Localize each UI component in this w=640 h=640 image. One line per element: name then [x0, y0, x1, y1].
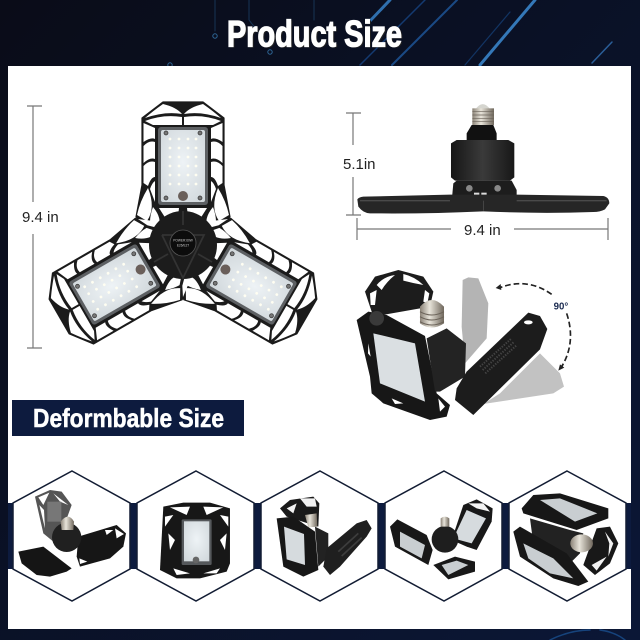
dimension: top view height: 9.4 in [22, 209, 59, 226]
hexagon 5: closed lamp with bulb [513, 493, 618, 586]
hexagon 1: lamp with open arms [18, 490, 126, 577]
title: Product Size [228, 14, 404, 56]
lamp: side view [357, 104, 609, 213]
hexagon 2: folded lamp front [160, 503, 230, 578]
lamp: top view with three panels: E26/E27 [177, 244, 189, 248]
lamp: folding view with rotation arrow: 90° [554, 301, 568, 312]
dimension: top view height [22, 106, 59, 348]
hexagon strip connectors [8, 503, 631, 569]
lamp: folding view with rotation arrow [357, 270, 570, 420]
section heading: deformable size: Deformbable Size [33, 403, 224, 433]
hexagon 4: three-way tilted lamp [390, 499, 493, 579]
hexagon frames [13, 471, 626, 601]
dimension: side view height: 5.1in [343, 156, 376, 173]
dimension: side view height [343, 113, 376, 215]
lamp: top view with three panels: POWER:60W [173, 238, 193, 242]
lamp: top view with three panels [36, 102, 330, 357]
dimension: side view width: 9.4 in [464, 222, 501, 239]
hexagon 3: partly folded lamp [277, 497, 372, 577]
dimension: side view width [357, 218, 608, 240]
title: Product Size [227, 14, 402, 54]
